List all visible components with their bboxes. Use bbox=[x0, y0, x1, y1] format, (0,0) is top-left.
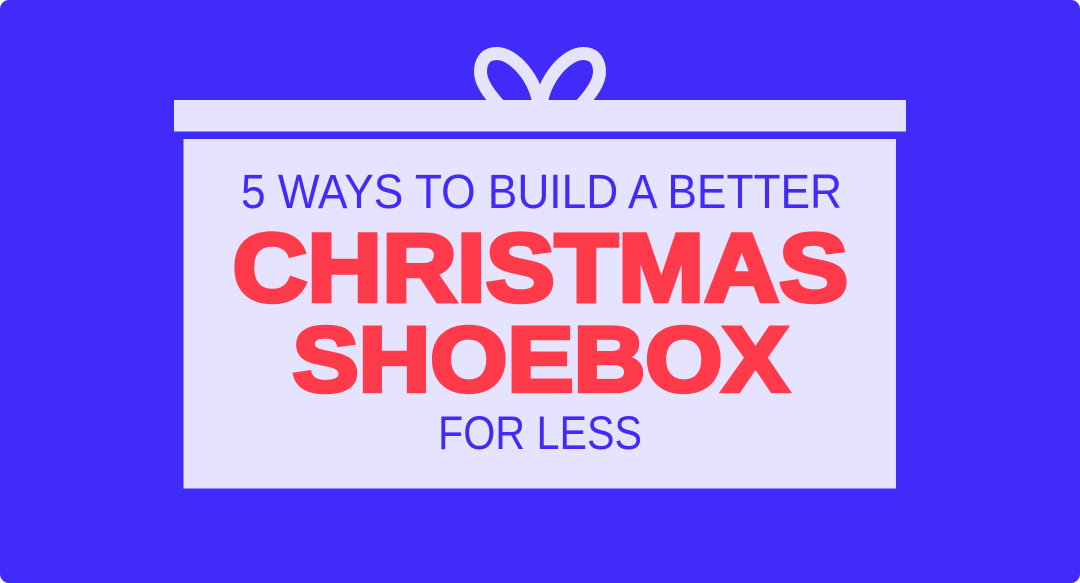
title line: 5 ways to build a better: 5 WAYS TO BUILD A BETTER bbox=[241, 166, 842, 219]
title line: Christmas: CHRISTMAS bbox=[232, 214, 848, 322]
icon: gift bow bbox=[480, 54, 600, 106]
gift box body bbox=[184, 139, 896, 488]
title line: for less: FOR LESS bbox=[438, 406, 642, 459]
gift box lid bbox=[174, 100, 906, 132]
title bbox=[232, 166, 848, 459]
title line: Shoebox: SHOEBOX bbox=[292, 307, 788, 411]
